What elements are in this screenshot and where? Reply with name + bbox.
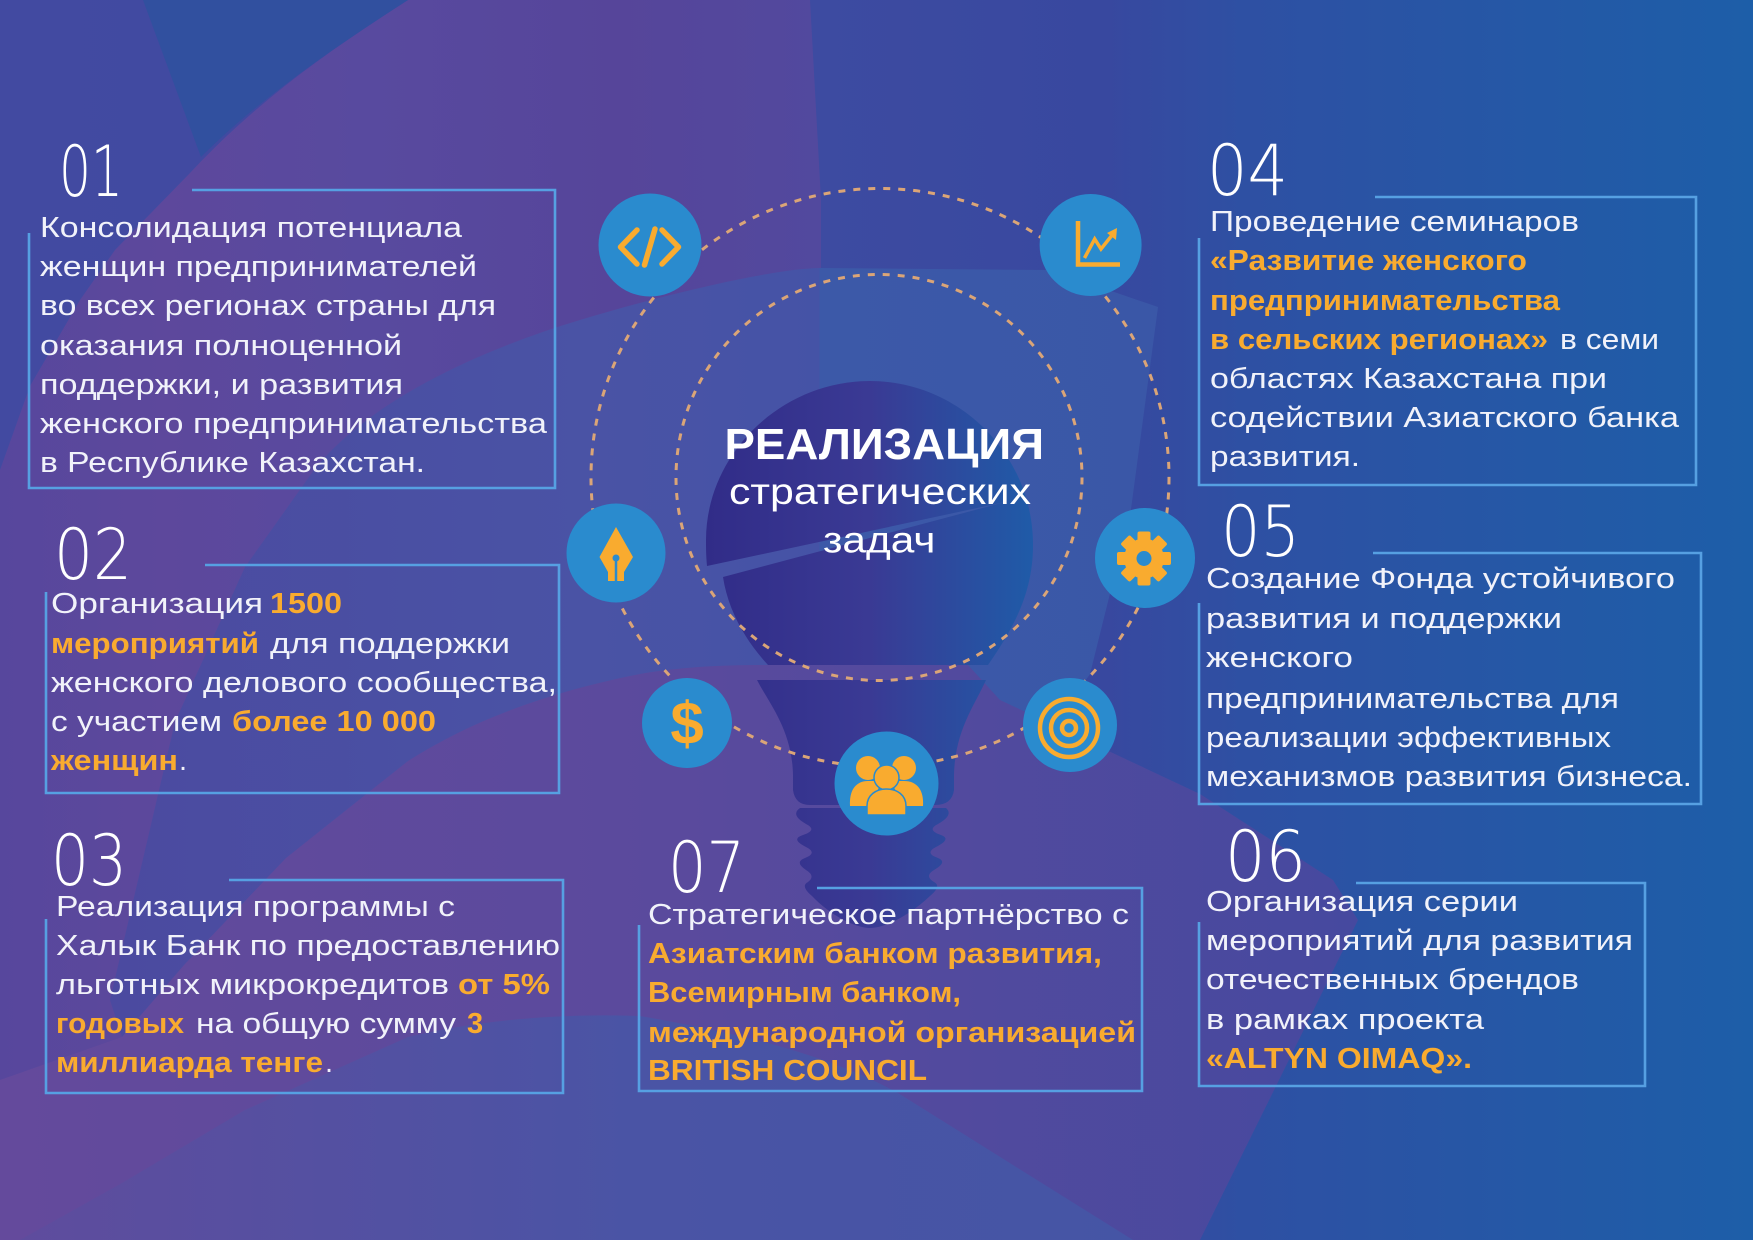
panel 02: 1500 <box>270 588 342 620</box>
icon: dollar <box>642 678 732 768</box>
panel 03: годовых <box>56 1008 184 1040</box>
panel 07: Азиатским банком развития, <box>648 938 1102 970</box>
panel 05: Создание Фонда устойчивого <box>1206 563 1675 595</box>
icon: dollar: $ <box>670 690 704 757</box>
panel 05: реализации эффективных <box>1206 722 1612 754</box>
icon: people <box>834 732 938 836</box>
panel 03: миллиарда тенге <box>56 1047 323 1079</box>
icon: gear <box>1095 508 1195 608</box>
panel 05 <box>1199 491 1701 804</box>
number 01: 01 <box>59 131 123 213</box>
panel 03: 3 <box>467 1008 483 1040</box>
panel 06: Организация серии <box>1206 886 1518 918</box>
title: central heading: задач <box>823 520 936 560</box>
panel 03: Халык Банк по предоставлению <box>56 930 560 962</box>
title: central heading: РЕАЛИЗАЦИЯ <box>724 420 1044 469</box>
panel 03: на общую сумму <box>196 1008 457 1040</box>
panel 07: международной организацией <box>648 1017 1136 1049</box>
panel 06: мероприятий для развития <box>1206 925 1633 957</box>
panel 04: «Развитие женского <box>1210 245 1527 277</box>
panel 07: BRITISH COUNCIL <box>648 1055 927 1087</box>
icon: target <box>1023 678 1117 772</box>
panel 01: женского предпринимательства <box>40 408 548 440</box>
panel 03: от 5% <box>458 969 550 1001</box>
number 05: 05 <box>1221 491 1300 573</box>
panel 03: . <box>325 1047 333 1079</box>
panel 04: содействии Азиатского банка <box>1210 402 1680 434</box>
panel 02: более 10 000 <box>232 706 436 738</box>
panel 02: . <box>179 745 187 777</box>
panel 06: в рамках проекта <box>1206 1004 1485 1036</box>
panel 01: оказания полноценной <box>40 330 402 362</box>
panel 01: поддержки, и развития <box>40 369 403 401</box>
panel 02: женского делового сообщества, <box>51 667 557 699</box>
panel 06: «ALTYN OIMAQ». <box>1206 1043 1472 1075</box>
panel 03 <box>46 820 563 1093</box>
panel 05: механизмов развития бизнеса. <box>1206 761 1692 793</box>
panel 05: развития и поддержки <box>1206 603 1562 635</box>
panel 04: в сельских регионах» <box>1210 324 1548 356</box>
icon: code <box>598 194 702 296</box>
panel 07: Всемирным банком, <box>648 977 961 1009</box>
number 06: 06 <box>1225 816 1306 898</box>
panel 02: с участием <box>51 706 222 738</box>
panel 04: областях Казахстана при <box>1210 363 1607 395</box>
panel 01: во всех регионах страны для <box>40 290 496 322</box>
title: central heading: стратегических <box>729 471 1032 512</box>
panel 05: женского <box>1206 642 1353 674</box>
panel 02: женщин <box>50 745 178 777</box>
panel 04: в семи <box>1560 324 1659 356</box>
panel 05: предпринимательства для <box>1206 683 1619 715</box>
panel 02: для поддержки <box>270 628 510 660</box>
panel 02 <box>46 514 559 793</box>
panel 01: женщин предпринимателей <box>40 251 477 283</box>
number 02: 02 <box>54 514 132 596</box>
panel 07 <box>639 827 1142 1091</box>
panel 03: Реализация программы с <box>56 891 455 923</box>
panel 02: Организация <box>51 588 263 620</box>
icon: pen nib <box>566 504 666 602</box>
panel 04: предпринимательства <box>1210 285 1561 317</box>
panel 04: развития. <box>1210 441 1360 473</box>
panel 06: отечественных брендов <box>1206 964 1579 996</box>
panel 04 <box>1199 130 1696 485</box>
title: central heading <box>724 420 1044 560</box>
panel 07: Стратегическое партнёрство с <box>648 899 1129 931</box>
lightbulb <box>706 381 1033 928</box>
panel 03: льготных микрокредитов <box>56 969 449 1001</box>
panel 01 <box>29 131 555 488</box>
panel 02: мероприятий <box>51 628 259 660</box>
dashed orbits <box>591 188 1169 766</box>
number 03: 03 <box>51 820 127 902</box>
panel 04: Проведение семинаров <box>1210 206 1579 238</box>
icon: growth chart <box>1040 194 1142 296</box>
panel 06 <box>1199 816 1645 1086</box>
panel 01: в Республике Казахстан. <box>40 447 425 479</box>
number 04: 04 <box>1207 130 1288 212</box>
number 07: 07 <box>668 827 745 909</box>
panel 01: Консолидация потенциала <box>40 212 463 244</box>
